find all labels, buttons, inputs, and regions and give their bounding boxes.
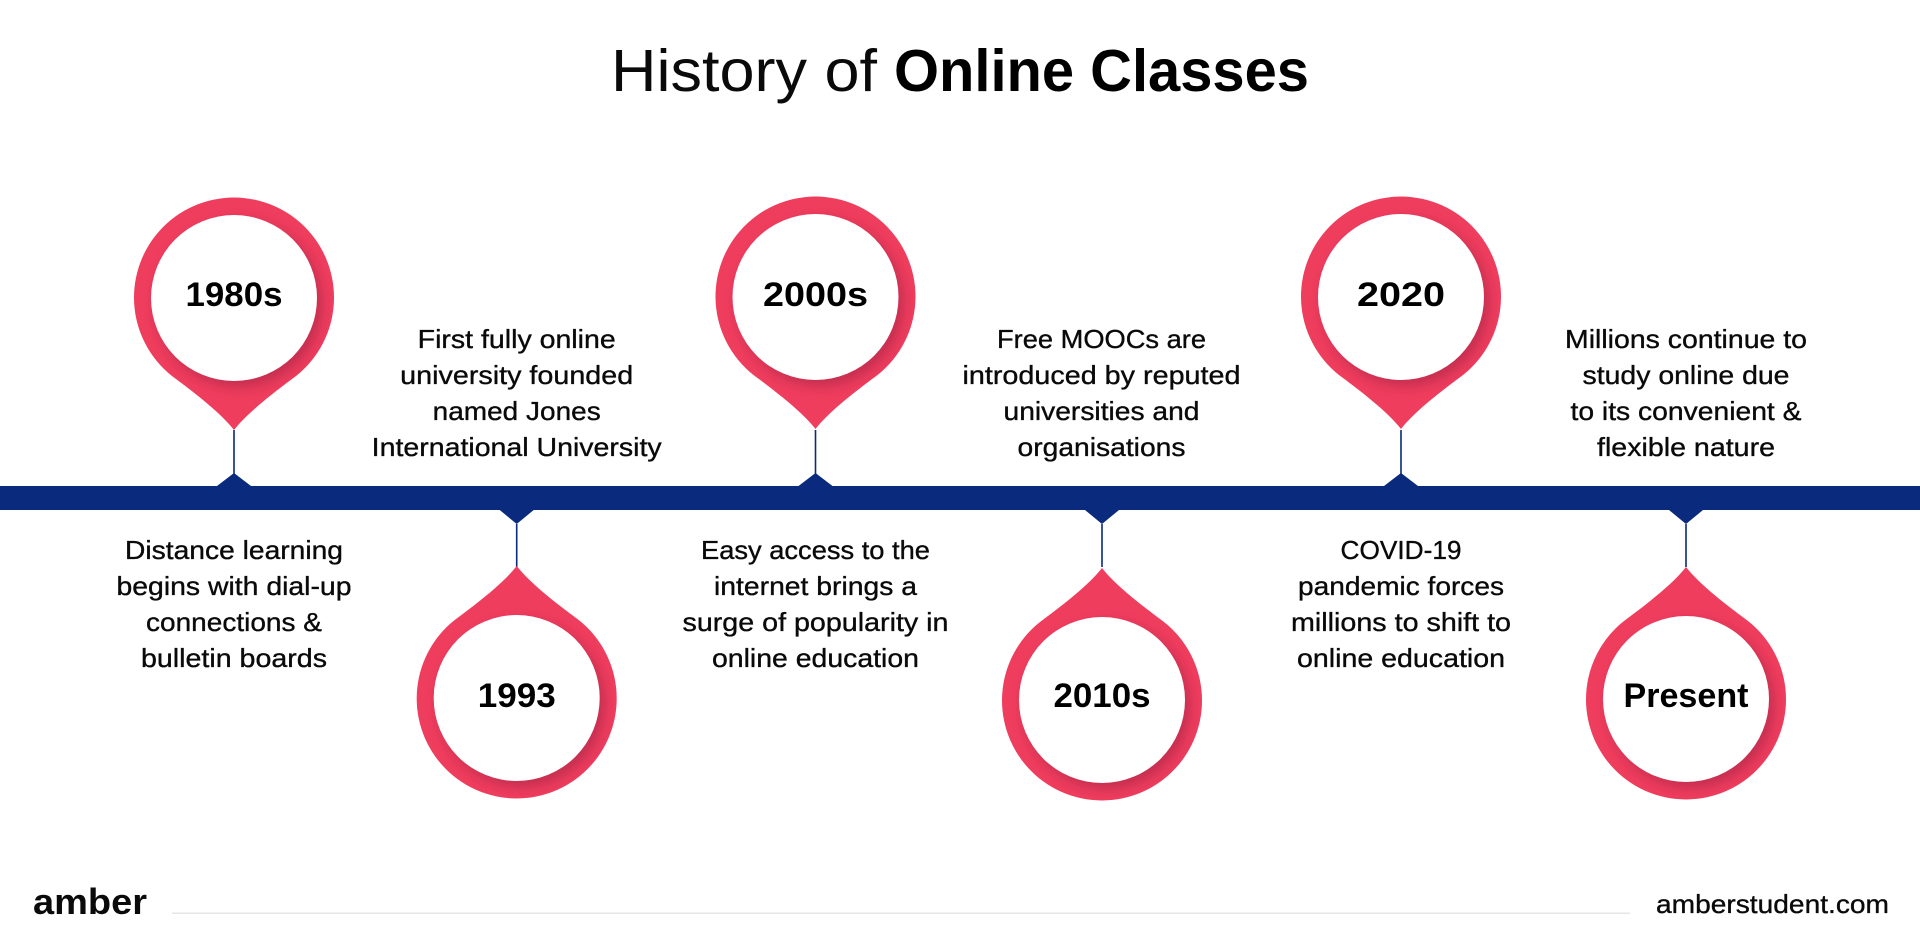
milestone: Present bbox=[1565, 324, 1807, 799]
text: 1993 description: First fully online bbox=[418, 324, 616, 354]
timeline bar bbox=[0, 430, 1920, 567]
pin: Present: Present bbox=[1624, 677, 1748, 715]
text: Present description: study online due bbox=[1582, 360, 1790, 390]
pin: 1980s bbox=[134, 198, 334, 430]
text: 1993 description: named Jones bbox=[433, 396, 601, 426]
pin: 2010s: 2010s bbox=[1054, 677, 1150, 715]
text: Present description: Millions continue to bbox=[1565, 324, 1807, 354]
pin: 2010s bbox=[1002, 568, 1202, 800]
milestone: 2020 bbox=[1291, 197, 1511, 673]
text: Present description: to its convenient & bbox=[1570, 396, 1802, 426]
footer divider bbox=[172, 912, 1630, 914]
text: Present description: flexible nature bbox=[1597, 432, 1775, 462]
text: 2010s description: introduced by reputed bbox=[962, 360, 1240, 390]
text: 2000s description bbox=[682, 535, 948, 673]
title: Online Classes bbox=[894, 38, 1309, 104]
pin: Present bbox=[1586, 567, 1786, 799]
pin: 2020: 2020 bbox=[1357, 276, 1445, 314]
pin: 2020 bbox=[1301, 197, 1501, 429]
text: 1993 description bbox=[372, 324, 662, 462]
text: 2010s description: organisations bbox=[1018, 432, 1186, 462]
text: 2010s description bbox=[962, 324, 1240, 462]
pin: 2000s bbox=[716, 197, 916, 429]
text: 1993 description: university founded bbox=[400, 360, 633, 390]
text: 2010s description: Free MOOCs are bbox=[997, 324, 1206, 354]
text: 2000s description: internet brings a bbox=[714, 571, 918, 601]
text: 2020 description: pandemic forces bbox=[1298, 571, 1504, 601]
text: 1980s description: bulletin boards bbox=[141, 643, 327, 673]
milestone: 1993 bbox=[372, 324, 662, 798]
text: 1980s description bbox=[116, 535, 352, 673]
text: 2000s description: surge of popularity in bbox=[682, 607, 948, 637]
text: 2020 description: COVID-19 bbox=[1340, 535, 1462, 565]
pin: 1980s: 1980s bbox=[186, 276, 282, 314]
text: 1980s description: begins with dial-up bbox=[116, 571, 352, 601]
text: 2020 description bbox=[1291, 535, 1511, 673]
title: History of bbox=[611, 38, 878, 104]
text: 2020 description: millions to shift to bbox=[1291, 607, 1511, 637]
text: 2020 description: online education bbox=[1297, 643, 1505, 673]
pin: 2000s: 2000s bbox=[763, 276, 868, 314]
text: 1980s description: Distance learning bbox=[125, 535, 343, 565]
footer website: amberstudent.com bbox=[1656, 889, 1889, 919]
text: 2010s description: universities and bbox=[1004, 396, 1200, 426]
footer logo: amber: amber bbox=[33, 881, 147, 922]
text: 2000s description: Easy access to the bbox=[701, 535, 930, 565]
pin: 1993 bbox=[417, 566, 617, 798]
pin: 1993: 1993 bbox=[478, 677, 556, 715]
text: Present description bbox=[1565, 324, 1807, 462]
text: 2000s description: online education bbox=[712, 643, 919, 673]
milestone: 1980s bbox=[116, 198, 352, 673]
text: 1993 description: International University bbox=[372, 432, 662, 462]
milestone: 2000s bbox=[682, 197, 948, 673]
text: 1980s description: connections & bbox=[146, 607, 322, 637]
milestone: 2010s bbox=[962, 324, 1240, 800]
